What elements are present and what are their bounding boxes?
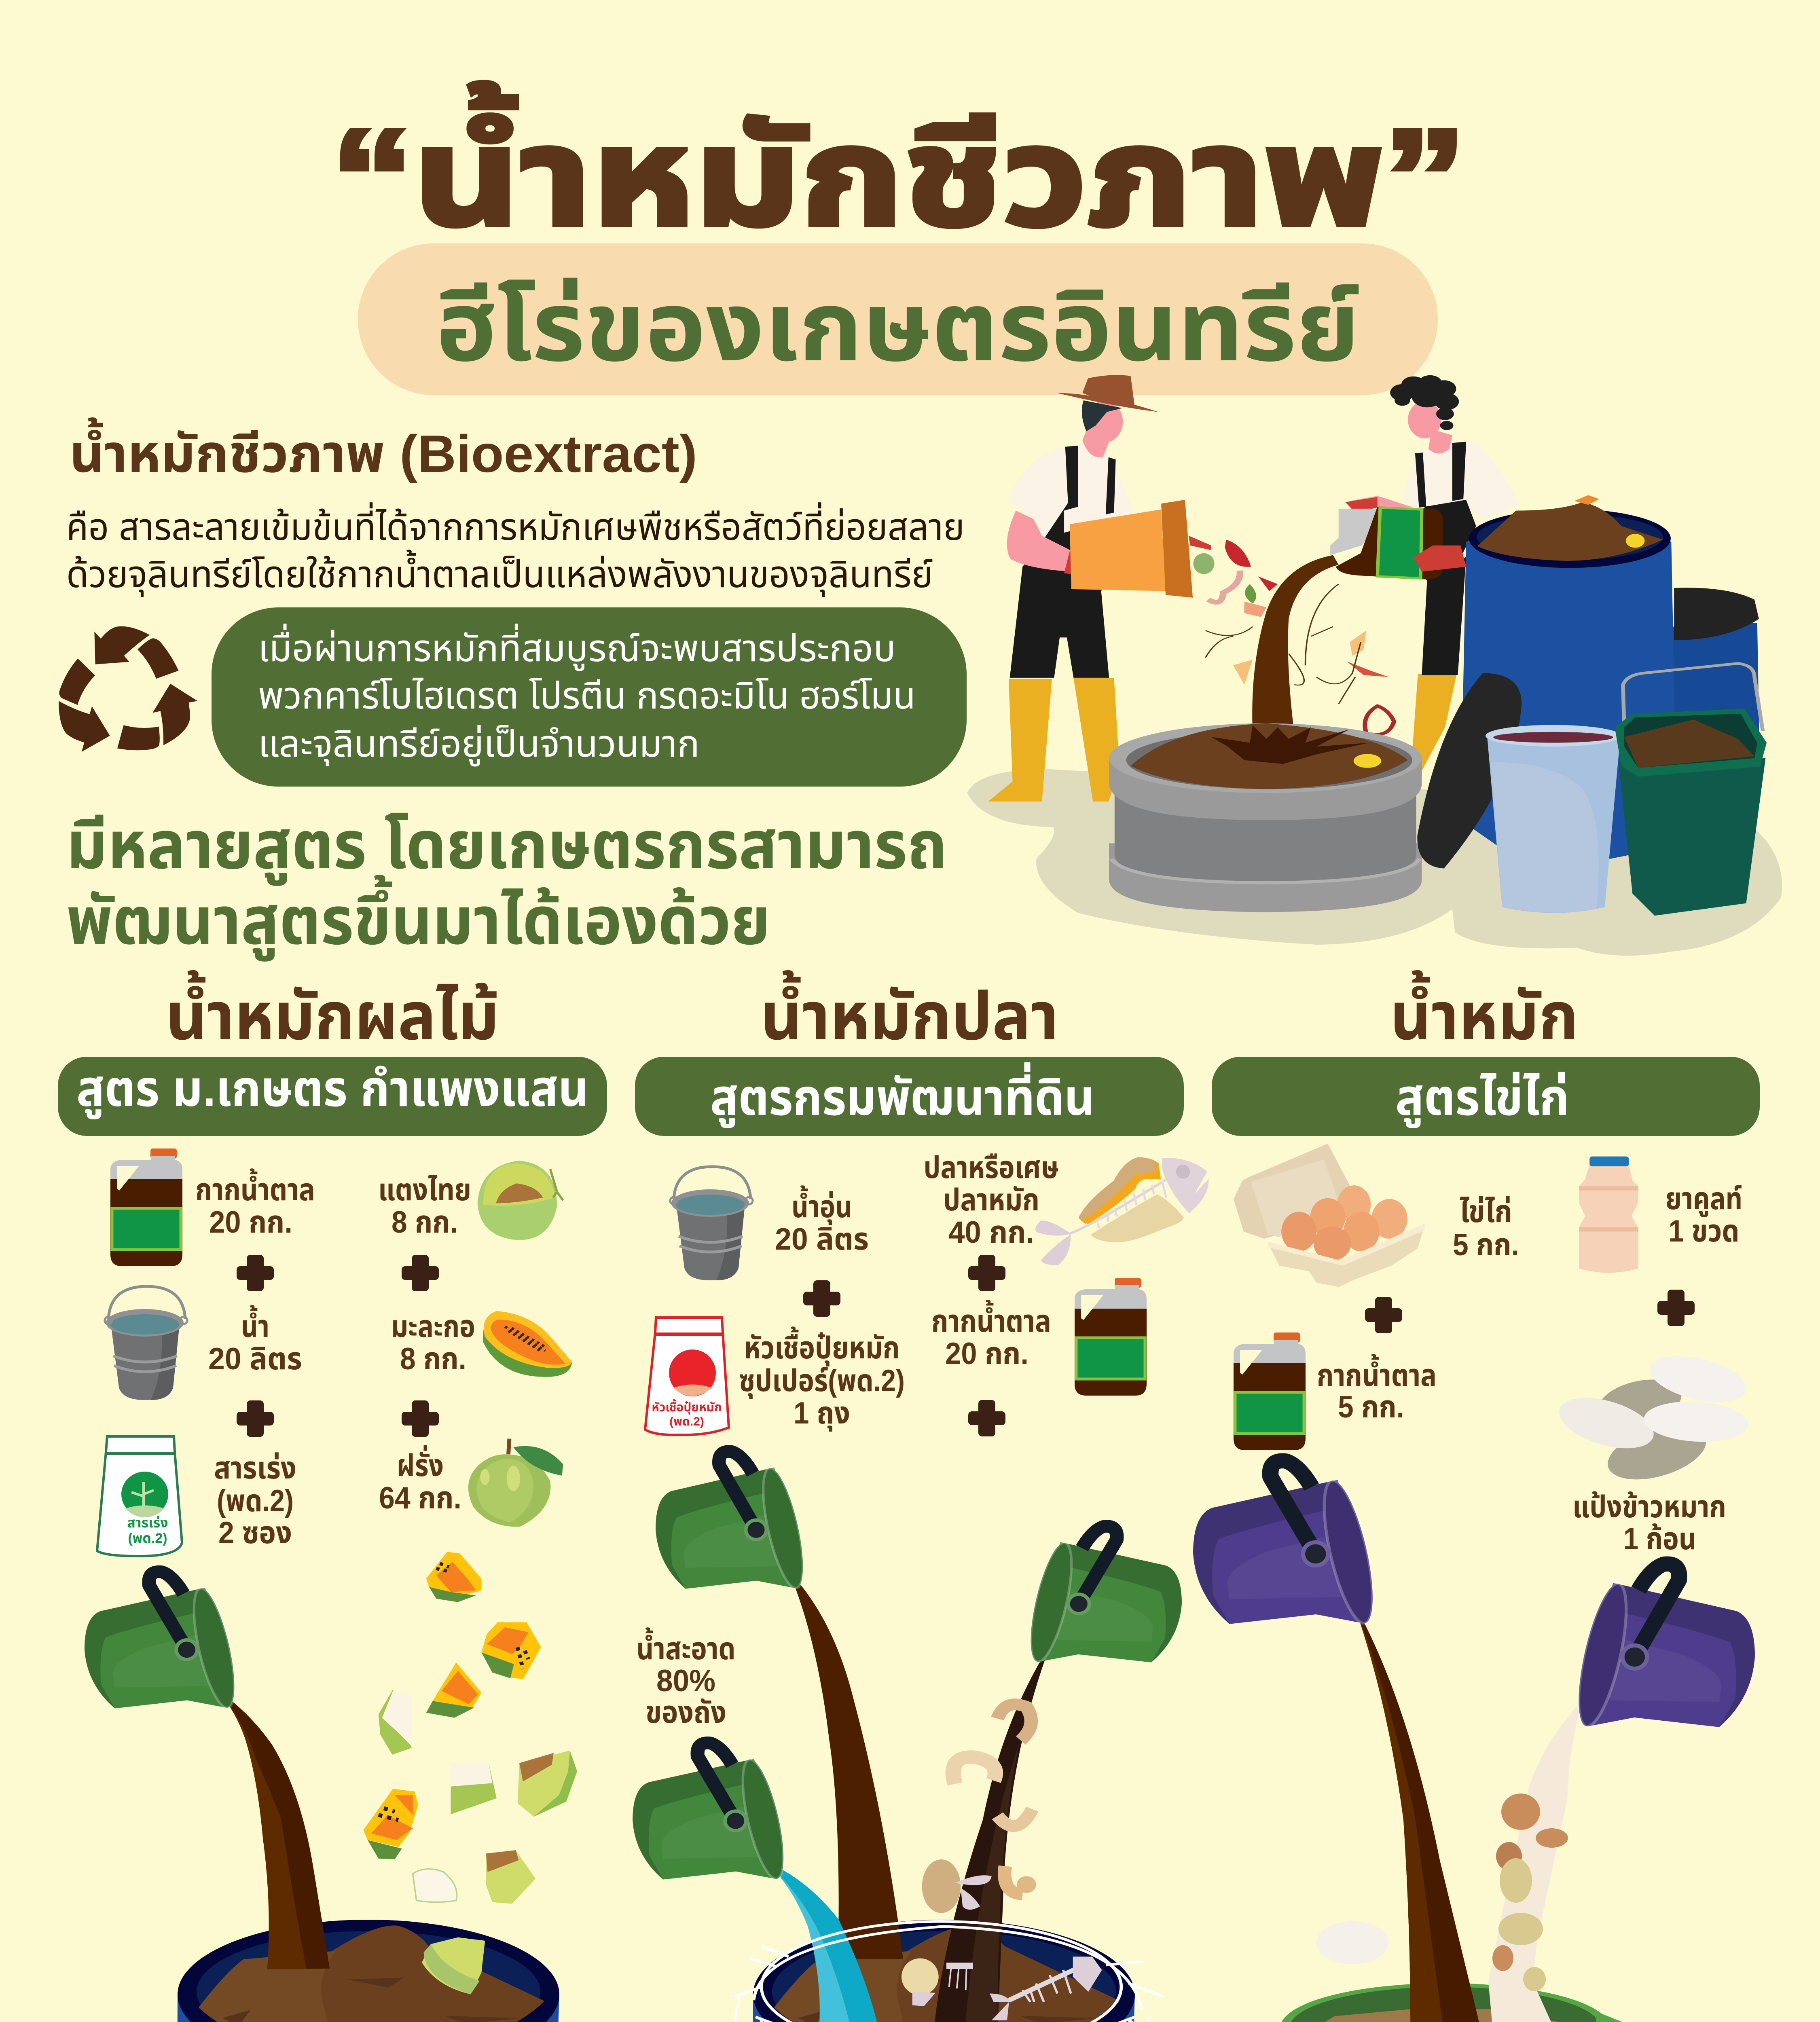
label: molasses 5 kg [1317, 1354, 1437, 1424]
icon: pail of warm water [670, 1167, 753, 1280]
icon: melon [478, 1161, 563, 1240]
green bin [1615, 663, 1767, 916]
label: fish 40 kg: ปลาหรือเศษ [924, 1151, 1059, 1185]
icon: green activator packet: (พด.2) [128, 1531, 167, 1546]
title: “น้ำหมักชีวภาพ” [331, 81, 1466, 254]
label: activator 2 sachets: 2 ซอง [218, 1516, 292, 1550]
icon: plus [968, 1400, 1005, 1436]
bucket: green pouring right [656, 1451, 811, 1591]
label: starter 1 bag [739, 1326, 905, 1432]
label: guava 64 kg: 64 กก. [379, 1481, 461, 1515]
formula pill 1 [58, 1057, 607, 1136]
falling scraps [1193, 539, 1394, 734]
bucket: purple pouring left [1569, 1564, 1755, 1730]
water bucket and stream [633, 1743, 882, 2022]
orange bin [1070, 500, 1211, 598]
column heading: egg: น้ำหมัก [1390, 970, 1578, 1053]
label: starter 1 bag: ซุปเปอร์(พด.2) [739, 1364, 905, 1399]
egg [1316, 1921, 1388, 1964]
icon: pail of water [105, 1286, 187, 1400]
icon: green activator packet [97, 1436, 182, 1556]
label: activator 2 sachets: (พด.2) [217, 1484, 294, 1518]
concrete compost pot [1109, 723, 1422, 912]
melon pieces [379, 1689, 577, 1995]
label: fish 40 kg: ปลาหมัก [943, 1183, 1039, 1217]
stream [216, 1689, 330, 1969]
green heading [66, 808, 947, 962]
ingredients column 2 [637, 1151, 1208, 1730]
barrel 1 with fruit bioextract [70, 1920, 559, 2022]
farmer right [1345, 375, 1519, 781]
label: yakult 1 bottle [1666, 1182, 1742, 1248]
label: molasses 20 kg: กากน้ำตาล [931, 1300, 1051, 1339]
stream from top bucket [789, 1571, 903, 1959]
icon: red starter packet: (พด.2) [669, 1415, 704, 1428]
egg slurry stream [1488, 1698, 1585, 2022]
barrel body [176, 1920, 559, 2022]
column heading: fruit: น้ำหมักผลไม้ [166, 970, 499, 1053]
bucket [85, 1572, 243, 1711]
stream poured from jug [1252, 555, 1339, 733]
callout: compounds: พวกคาร์โบไฮเดรต โปรตีน กรดอะมิโน ฮอร์โมน [258, 675, 916, 717]
label: clean water 80% of tank: 80% [656, 1664, 715, 1698]
callout: compounds: และจุลินทรีย์อยู่เป็นจำนวนมาก [258, 723, 700, 766]
label: activator 2 sachets: สารเร่ง [214, 1451, 296, 1485]
label: eggs 5 kg: 5 กก. [1453, 1228, 1519, 1262]
label: papaya 8 kg: 8 กก. [400, 1342, 466, 1376]
green jug bucket with egg bioextract [1198, 1985, 1747, 2022]
label: starter 1 bag: 1 ถุง [794, 1396, 850, 1432]
icon: recycling arrows [59, 626, 197, 752]
definition text [66, 502, 965, 597]
black lid [1417, 673, 1522, 868]
icon: papaya [483, 1311, 572, 1377]
barrel 2 with fish bioextract [633, 1571, 1168, 2022]
definition text: ด้วยจุลินทรีย์โดยใช้กากน้ำตาลเป็นแหล่งพลังงานของจุลินทรีย์ [66, 550, 933, 597]
label: rice yeast 1 cake: 1 ก้อน [1623, 1522, 1696, 1556]
papaya pieces [363, 1552, 541, 1859]
molasses jug [1330, 507, 1466, 580]
green heading: พัฒนาสูตรขึ้นมาได้เองด้วย [66, 874, 770, 962]
subtitle pill [358, 243, 1438, 395]
front barrel with compost [1460, 495, 1677, 859]
fish slurry stream [933, 1644, 1051, 2022]
ingredients column 1 [97, 1148, 572, 1556]
label: eggs 5 kg: ไข่ไก่ [1460, 1195, 1512, 1229]
illustration: farmers composting [967, 375, 1782, 956]
ground shadow [967, 769, 1782, 956]
label: papaya 8 kg: มะละกอ [391, 1309, 475, 1344]
definition heading: น้ำหมักชีวภาพ (Bioextract) [70, 417, 697, 483]
egg stream and purple buckets [1193, 1461, 1755, 2022]
label: fish 40 kg: 40 กก. [948, 1215, 1034, 1250]
label: yakult 1 bottle: ยาคูลท์ [1666, 1182, 1742, 1217]
ingredients column 3 [1234, 1144, 1754, 1556]
formula pill 2 [635, 1057, 1184, 1136]
label: rice yeast 1 cake [1572, 1490, 1726, 1556]
label: molasses 5 kg: 5 กก. [1338, 1390, 1404, 1424]
label: molasses 5 kg: กากน้ำตาล [1317, 1354, 1437, 1393]
label: activator 2 sachets [214, 1451, 296, 1550]
label: starter 1 bag: หัวเชื้อปุ๋ยหมัก [744, 1326, 899, 1366]
label: molasses 20 kg [931, 1300, 1051, 1371]
fish scraps and bones [902, 1705, 1102, 2022]
label: papaya 8 kg [391, 1309, 475, 1376]
label: warm water 20 litres: 20 ลิตร [775, 1222, 869, 1256]
top buckets in column 2 [656, 1451, 1182, 1665]
formula pill 3 [1212, 1057, 1760, 1136]
label: fish 40 kg [924, 1151, 1059, 1250]
label: clean water 80% of tank: น้ำสะอาด [637, 1627, 735, 1666]
icon: rice yeast cakes [1549, 1347, 1754, 1490]
icon: plus [1657, 1290, 1695, 1326]
barrel body [752, 1920, 1135, 2022]
icon: plus [237, 1255, 274, 1291]
definition text: คือ สารละลายเข้มข้นที่ได้จากการหมักเศษพืชหรือสัตว์ที่ย่อยสลาย [66, 502, 965, 548]
label: water 20 litres: น้ำ [241, 1305, 269, 1344]
back barrel [1671, 588, 1760, 801]
icon: molasses jug [1075, 1278, 1147, 1396]
icon: green activator packet: สารเร่ง [127, 1515, 168, 1531]
icon: plus [968, 1255, 1005, 1291]
label: rice yeast 1 cake: แป้งข้าวหมาก [1572, 1490, 1726, 1524]
label: yakult 1 bottle: 1 ขวด [1669, 1214, 1739, 1248]
label: warm water 20 litres: น้ำอุ่น [791, 1185, 852, 1225]
label: melon 8 kg: แตงไทย [378, 1173, 471, 1207]
label: molasses 20 kg: กากน้ำตาล [195, 1168, 315, 1207]
label: melon 8 kg [378, 1173, 471, 1239]
label: guava 64 kg [379, 1445, 461, 1515]
subtitle: ฮีโร่ของเกษตรอินทรีย์ [436, 273, 1360, 381]
icon: molasses jug [110, 1148, 182, 1266]
column heading: fish: น้ำหมักปลา [760, 970, 1059, 1053]
fishing net [734, 1921, 1168, 2022]
formula pill 2: สูตรกรมพัฒนาที่ดิน [710, 1062, 1094, 1128]
icon: fish scraps [1035, 1157, 1208, 1265]
icon: egg tray [1234, 1144, 1425, 1287]
bucket: green pouring left [1022, 1526, 1182, 1665]
label: clean water 80% of tank: ของถัง [645, 1695, 726, 1730]
callout: compounds: เมื่อผ่านการหมักที่สมบูรณ์จะพบสารประกอบ [258, 624, 896, 671]
label: water 20 litres [208, 1305, 302, 1376]
green bucket body [1285, 1985, 1637, 2022]
icon: red starter packet: หัวเชื้อปุ๋ยหมัก [652, 1398, 722, 1415]
farmer left [988, 375, 1158, 802]
icon: guava [468, 1439, 563, 1527]
bucket: purple pouring right [1193, 1461, 1383, 1626]
molasses stream [1353, 1601, 1489, 2022]
label: molasses 20 kg: 20 กก. [209, 1205, 292, 1239]
icon: molasses jug [1234, 1332, 1306, 1450]
label: clean water 80% of tank [637, 1627, 735, 1730]
icon: plus [803, 1280, 840, 1317]
label: guava 64 kg: ฝรั่ง [397, 1445, 444, 1483]
label: molasses 20 kg: 20 กก. [945, 1337, 1029, 1371]
icon: red starter packet [645, 1318, 729, 1435]
icon: plus [237, 1400, 274, 1437]
label: warm water 20 litres [775, 1185, 869, 1256]
icon: plus [402, 1400, 439, 1437]
label: eggs 5 kg [1453, 1195, 1519, 1262]
icon: plus [402, 1255, 439, 1291]
callout: compounds [212, 607, 967, 787]
label: molasses 20 kg [195, 1168, 315, 1239]
formula pill 1: สูตร ม.เกษตร กำแพงแสน [76, 1061, 588, 1119]
green heading: มีหลายสูตร โดยเกษตรกรสามารถ [66, 808, 947, 886]
label: melon 8 kg: 8 กก. [392, 1205, 458, 1239]
pouring bucket and fruit pieces [85, 1552, 577, 1995]
icon: yakult bottle [1579, 1157, 1638, 1273]
label: water 20 litres: 20 ลิตร [208, 1342, 302, 1376]
formula pill 3: สูตรไข่ไก่ [1395, 1070, 1569, 1128]
light blue cup [1486, 725, 1621, 913]
icon: plus [1365, 1297, 1402, 1333]
